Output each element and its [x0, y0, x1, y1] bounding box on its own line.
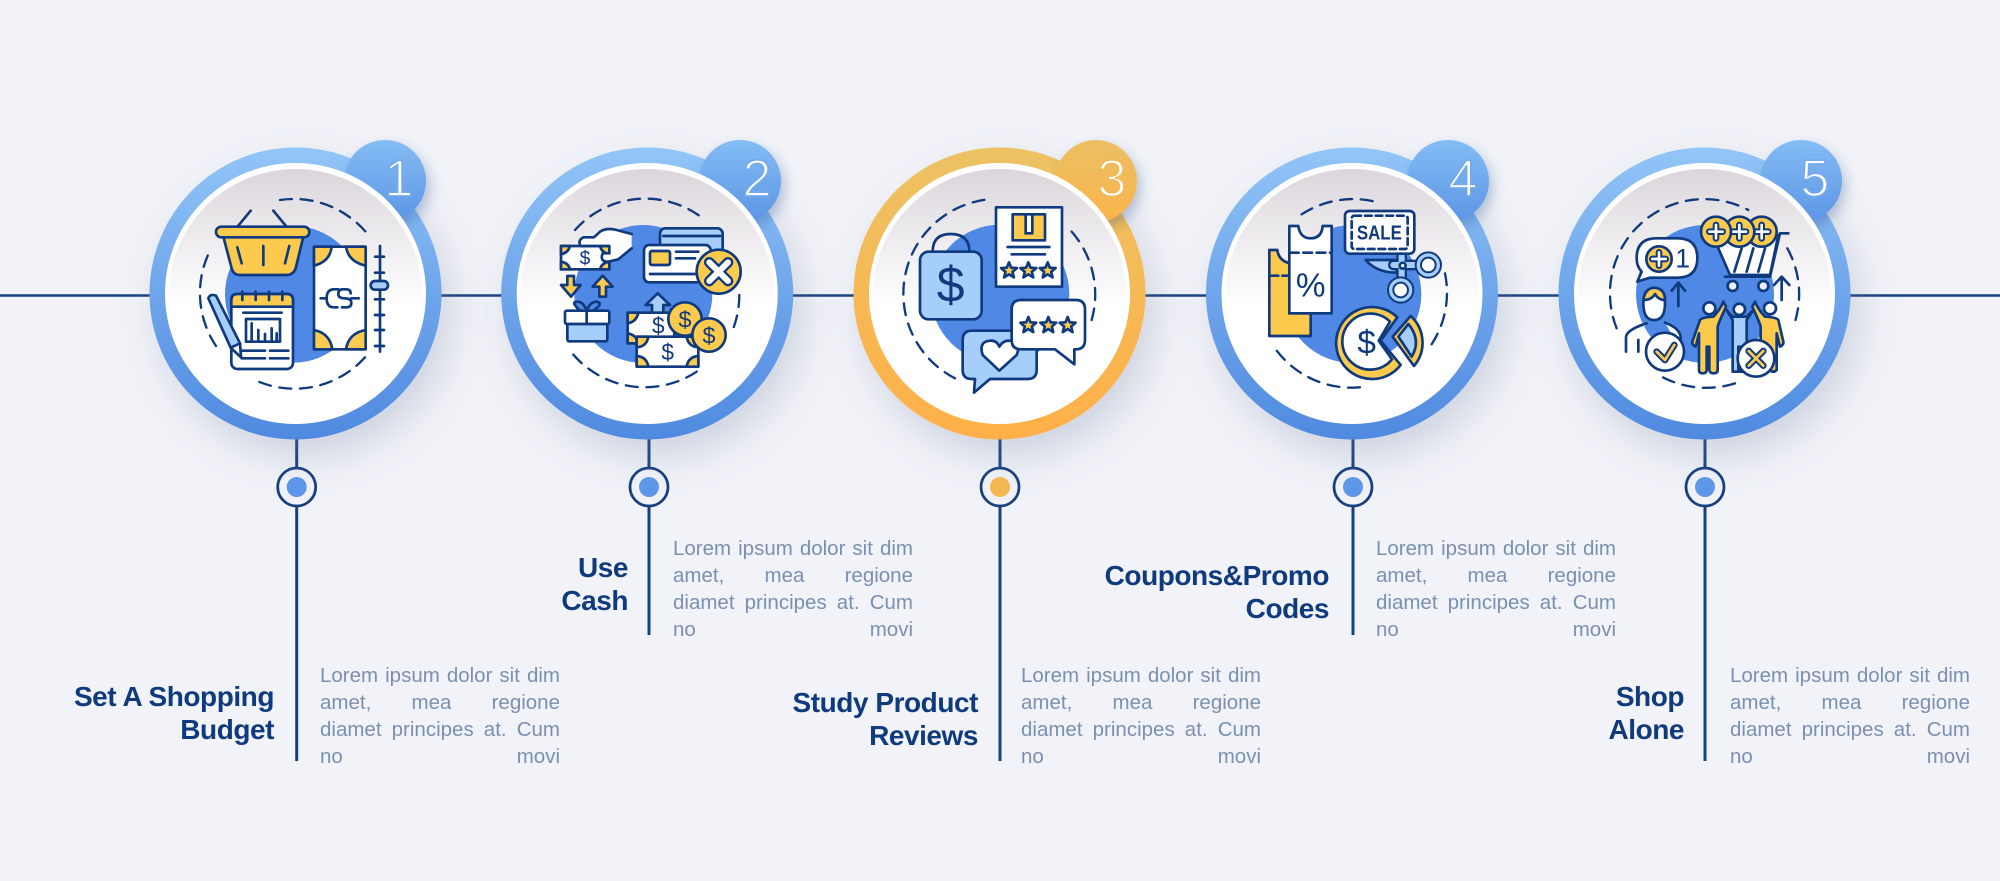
text block: step 2 description [673, 537, 913, 641]
text block: step 1 description [320, 664, 560, 768]
icon: discount tickets, sale coupon, scissors and price pie [1269, 199, 1447, 388]
text block: step 1 description: amet, mea regione [320, 691, 560, 714]
heading: Study Product Reviews: Reviews [869, 720, 978, 751]
heading: Set A Shopping Budget: Set A Shopping [74, 681, 274, 712]
ring 1 [150, 148, 442, 440]
number badge 3 [1055, 140, 1137, 222]
number badge 5 [1760, 140, 1842, 222]
heading: Coupons&Promo Codes: Codes [1246, 593, 1329, 624]
heading: Coupons&Promo Codes [1105, 560, 1329, 624]
icon: lone shopper versus a group with a full cart: 1 [1675, 243, 1690, 273]
icon: cash, credit card refused and gift: $ [661, 339, 674, 365]
text block: step 4 description: amet, mea regione [1376, 564, 1616, 587]
heading: Use Cash [561, 552, 628, 616]
number badge 1 [344, 140, 426, 222]
text block: step 5 description: Lorem ipsum dolor sit dim [1730, 664, 1970, 687]
step 5 graphic: shop alone [1558, 140, 1850, 761]
icon: cash, credit card refused and gift: $ [580, 249, 591, 270]
text block: step 4 description: no movi [1376, 618, 1616, 641]
icon: lone shopper versus a group with a full cart [1610, 199, 1799, 388]
heading: Coupons&Promo Codes: Coupons&Promo [1105, 560, 1329, 591]
heading: Study Product Reviews: Study Product [792, 687, 978, 718]
icon: basket, budget calendar and banknote [200, 199, 388, 389]
text block: step 3 description: no movi [1021, 745, 1261, 768]
icon: discount tickets, sale coupon, scissors and price pie: % [1296, 268, 1325, 305]
number badge 1: 1 [385, 150, 413, 208]
step 2 graphic: use cash [501, 140, 793, 635]
icon: shopping bag, rated product and review bubbles: $ [937, 257, 965, 313]
number badge 2 [699, 140, 781, 222]
text block: step 3 description [1021, 664, 1261, 768]
inner disc 3 [869, 163, 1130, 424]
text block: step 5 description: amet, mea regione [1730, 691, 1970, 714]
ring 2 [501, 148, 793, 440]
horizontal timeline line [0, 294, 2000, 297]
stem and node 3 [981, 430, 1019, 761]
number badge 3: 3 [1098, 150, 1126, 208]
text block: step 2 description: diamet principes at. Cum [673, 591, 913, 614]
icon: discount tickets, sale coupon, scissors and price pie: SALE [1357, 223, 1402, 245]
text block: step 4 description: diamet principes at. Cum [1376, 591, 1616, 614]
number badge 4: 4 [1449, 150, 1477, 208]
stem and node 1 [278, 430, 316, 761]
icon: cash, credit card refused and gift [561, 199, 741, 387]
icon: cash, credit card refused and gift: $ [703, 322, 716, 348]
heading: Shop Alone: Shop [1616, 681, 1684, 712]
text block: step 2 description: Lorem ipsum dolor sit dim [673, 537, 913, 560]
stem and node 4 [1334, 430, 1372, 635]
stem and node 2 [630, 430, 668, 635]
number badge 2: 2 [743, 150, 771, 208]
inner disc 5 [1574, 163, 1835, 424]
text block: step 5 description [1730, 664, 1970, 768]
inner disc 1 [165, 163, 426, 424]
number badge 5: 5 [1801, 150, 1829, 208]
text block: step 3 description: diamet principes at. Cum [1021, 718, 1261, 741]
heading: Shop Alone [1608, 681, 1684, 745]
text block: step 5 description: no movi [1730, 745, 1970, 768]
stem and node 5 [1686, 430, 1724, 761]
text block: step 5 description: diamet principes at. Cum [1730, 718, 1970, 741]
heading: Set A Shopping Budget: Budget [180, 714, 274, 745]
ring 3 [854, 148, 1146, 440]
heading: Shop Alone: Alone [1608, 714, 1684, 745]
number badge 4 [1407, 140, 1489, 222]
text block: step 1 description: no movi [320, 745, 560, 768]
icon: cash, credit card refused and gift: $ [679, 306, 692, 332]
text block: step 2 description: no movi [673, 618, 913, 641]
text block: step 1 description: diamet principes at. Cum [320, 718, 560, 741]
text block: step 3 description: amet, mea regione [1021, 691, 1261, 714]
icon: cash, credit card refused and gift: $ [652, 312, 665, 338]
ring 5 [1558, 148, 1850, 440]
step 1 graphic: set a shopping budget [150, 140, 442, 761]
text block: step 3 description: Lorem ipsum dolor sit dim [1021, 664, 1261, 687]
inner disc 2 [517, 163, 778, 424]
heading: Set A Shopping Budget [74, 681, 274, 745]
inner disc 4 [1222, 163, 1482, 424]
icon: discount tickets, sale coupon, scissors and price pie: $ [1357, 324, 1376, 361]
text block: step 4 description: Lorem ipsum dolor sit dim [1376, 537, 1616, 560]
text block: step 1 description: Lorem ipsum dolor sit dim [320, 664, 560, 687]
step 3 graphic: study product reviews (highlighted) [854, 140, 1146, 761]
icon: shopping bag, rated product and review bubbles [903, 199, 1095, 393]
heading: Study Product Reviews [792, 687, 978, 751]
ring 4 [1206, 148, 1498, 440]
heading: Use Cash: Use [578, 552, 628, 583]
heading: Use Cash: Cash [561, 585, 628, 616]
text block: step 2 description: amet, mea regione [673, 564, 913, 587]
step 4 graphic: coupons and promo codes [1206, 140, 1498, 635]
text block: step 4 description [1376, 537, 1616, 641]
